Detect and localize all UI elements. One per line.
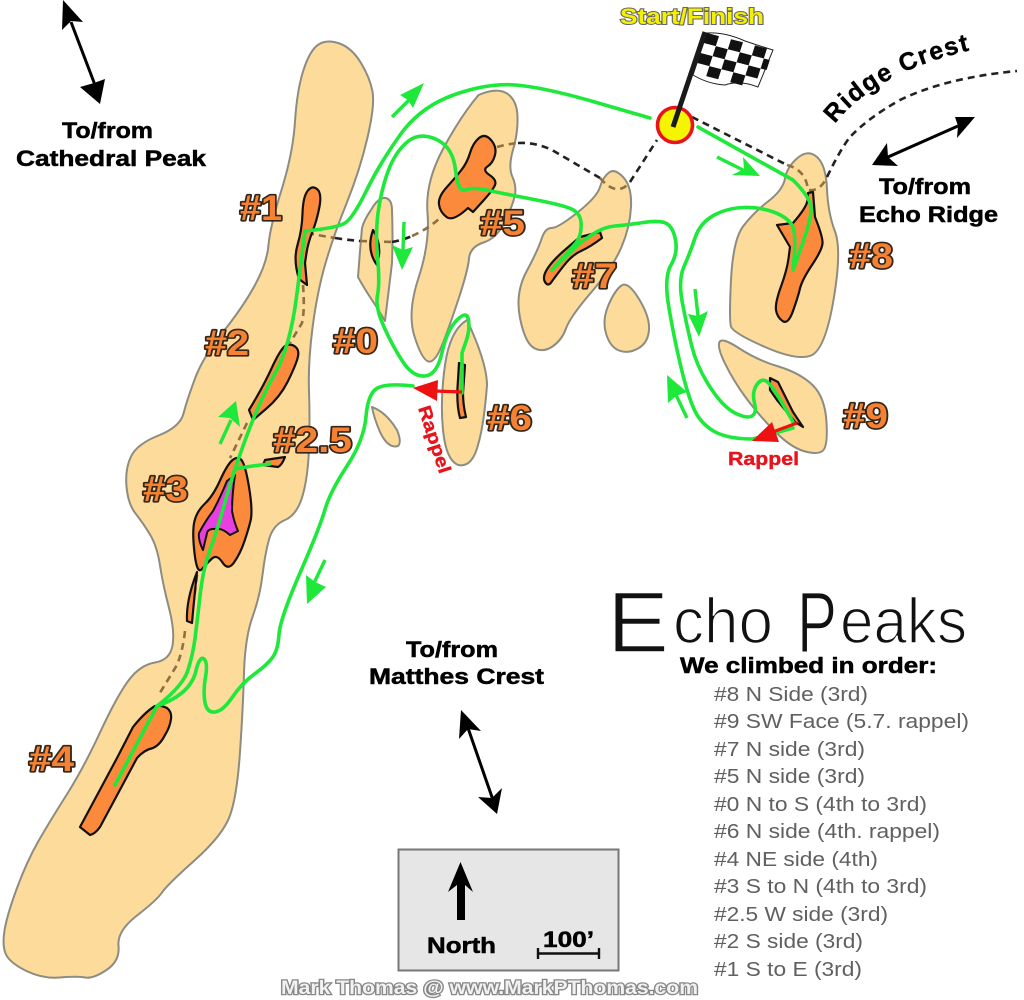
- climb order list: #5 N side (3rd): [714, 766, 865, 788]
- peak labels: #5: [480, 204, 525, 243]
- heading: Start/Finish: Start/Finish: [620, 4, 764, 29]
- climb order list: #7 N side (3rd): [714, 739, 865, 761]
- peak labels: #3: [143, 470, 188, 509]
- title: Echo Peaks: P: [797, 575, 837, 671]
- island: #7: [518, 171, 631, 350]
- climb order list: #6 N side (4th. rappel): [714, 821, 940, 843]
- rappel labels: Rappel: [728, 449, 799, 469]
- climb order list: #3 S to N (4th to 3rd): [714, 876, 927, 898]
- peak labels: [29, 189, 893, 779]
- red rappel arrows: [413, 380, 797, 442]
- scale bar: [538, 948, 599, 959]
- climb order list: #2 S side (3rd): [714, 931, 863, 953]
- text: Cathedral Peak: [16, 118, 207, 171]
- arrow: south to #9: [688, 289, 708, 337]
- rock: #5: [439, 136, 496, 218]
- climb order list: [714, 684, 969, 981]
- rappel labels: Rappel: [414, 403, 455, 476]
- title: Echo Peaks: E: [607, 575, 669, 671]
- climb order list: #9 SW Face (5.7. rappel): [714, 711, 969, 733]
- text: Echo Ridge: [859, 174, 998, 227]
- island: #0: [358, 198, 392, 321]
- arrow: #9 rappel: [752, 422, 797, 442]
- island: #5: [412, 91, 518, 362]
- dashed ridge crest line: [158, 71, 1017, 696]
- rock: #1: [296, 187, 320, 285]
- green climbing route: [115, 85, 811, 785]
- island: #6: [442, 320, 487, 465]
- peak labels: #8: [849, 237, 893, 276]
- rock: #3 lower strip: [187, 572, 197, 623]
- arrow: Cathedral Peak: [62, 0, 105, 104]
- peak labels: #9: [843, 397, 888, 436]
- icon: north arrow: [448, 862, 473, 920]
- text: scale 100 feet: 100’: [543, 927, 594, 952]
- climb order list: #1 S to E (3rd): [714, 959, 862, 981]
- text: North: North: [427, 933, 496, 958]
- text: Cathedral Peak: To/from: [62, 118, 153, 143]
- ridge crest label: Ridge Crest: [822, 35, 970, 123]
- island: small central: [604, 285, 649, 352]
- list heading: We climbed in order:: [680, 653, 937, 678]
- watermark credit: Mark Thomas @ www.MarkPThomas.com: [281, 978, 698, 999]
- arrow: southeast to #8: [717, 157, 760, 176]
- peak labels: #2: [205, 324, 249, 363]
- checkered flag: [693, 33, 773, 90]
- rock: #2: [249, 345, 298, 420]
- rock: #0: [370, 230, 379, 265]
- peak labels: #2.5: [273, 421, 352, 460]
- direction: Echo Ridge: [859, 117, 998, 227]
- island: main west ridge: [4, 41, 373, 978]
- arrow: south by #0: [392, 222, 413, 270]
- peak labels: #4: [29, 740, 75, 779]
- rock: #7: [544, 232, 602, 284]
- text: Matthes Crest: [369, 637, 545, 689]
- legend box: [398, 850, 618, 970]
- climb order list: #8 N Side (3rd): [714, 684, 868, 706]
- map islands: [4, 41, 838, 978]
- rock: #8: [776, 192, 823, 322]
- rock: #6: [457, 363, 466, 418]
- peak labels: #6: [487, 399, 532, 438]
- arrow: southwest on return: [306, 560, 326, 604]
- start circle: [658, 108, 692, 142]
- text: Echo Ridge: Echo Ridge: [859, 202, 998, 227]
- arrow: #6 rappel: [413, 380, 462, 401]
- start/finish marker: [658, 32, 773, 142]
- peak labels: #7: [572, 257, 617, 296]
- direction: Cathedral Peak: [16, 0, 207, 171]
- rappel labels: [414, 403, 799, 476]
- rock: #2.5: [263, 457, 285, 467]
- title: Echo Peaks: [607, 575, 967, 671]
- island: small rock below #0: [372, 407, 400, 446]
- rock: #3 crux in magenta: [199, 475, 238, 550]
- rock: #4: [80, 706, 171, 835]
- rock: #9: [770, 378, 803, 427]
- arrow: north from #9: [667, 375, 687, 418]
- text: Matthes Crest: To/from: [406, 637, 498, 662]
- arrow: Matthes Crest: [459, 710, 502, 814]
- island: #8: [730, 153, 838, 357]
- peak labels: #1: [240, 189, 282, 228]
- arrow: Echo Ridge: [872, 117, 975, 166]
- title: Echo Peaks: cho: [673, 585, 773, 657]
- climb order list: #0 N to S (4th to 3rd): [714, 794, 927, 816]
- title: Echo Peaks: eaks: [840, 585, 967, 657]
- direction: Matthes Crest: [369, 637, 545, 814]
- flag pole: [673, 32, 705, 127]
- rock: #3: [193, 458, 251, 570]
- island: #9: [719, 340, 827, 453]
- route direction arrows: [218, 83, 760, 604]
- climb order list: #4 NE side (4th): [714, 849, 878, 871]
- text: Echo Ridge: To/from: [879, 174, 971, 199]
- peak labels: #0: [333, 322, 378, 361]
- arrow: north by #3: [218, 401, 240, 444]
- climbed rock outcrops: [80, 136, 823, 835]
- text: Cathedral Peak: Cathedral Peak: [16, 146, 207, 171]
- text: Matthes Crest: Matthes Crest: [369, 664, 545, 689]
- arrow: northeast above #0: [392, 83, 424, 117]
- climb order list: #2.5 W side (3rd): [714, 904, 888, 926]
